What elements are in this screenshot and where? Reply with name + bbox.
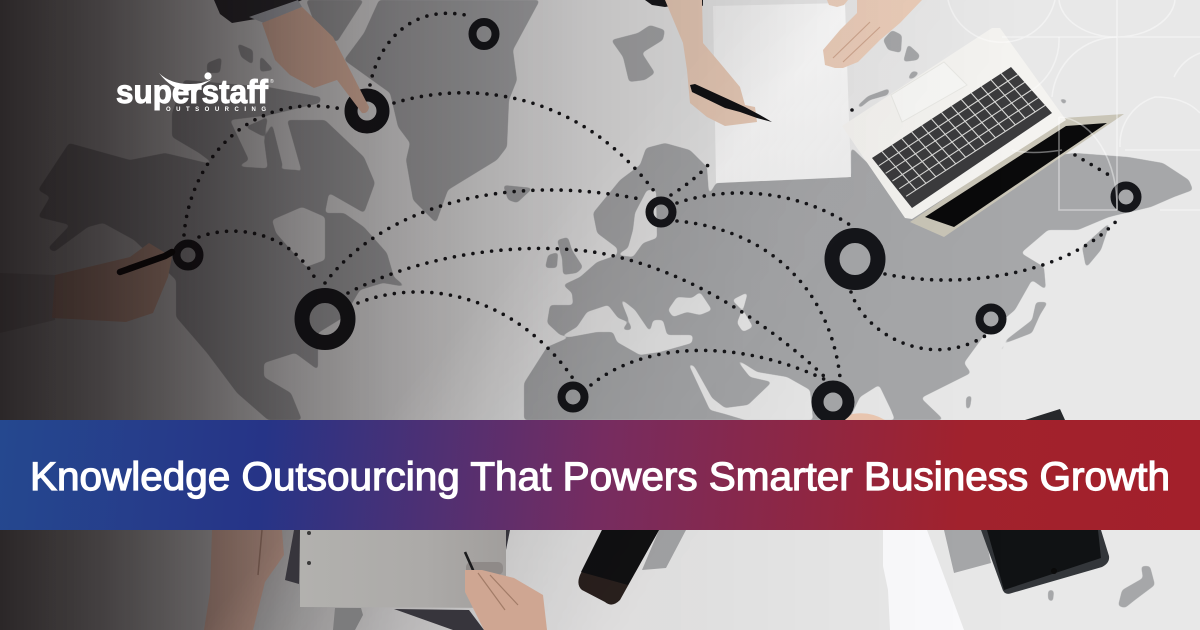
bottom notebook [285,530,510,630]
bottom map islands [1048,566,1155,608]
hand tip above banner [845,413,885,420]
world map [38,0,1193,420]
hand on paper [823,0,922,68]
ring: west [176,244,200,266]
ring: africa [562,386,584,408]
trackpad [891,62,967,122]
registered mark: ® [270,78,274,85]
laptop screen lid [910,114,1124,237]
logo wordmark: superstaff [116,73,269,110]
ring: south asia [818,386,848,418]
bottom-left hand [204,530,284,630]
ring: north [472,22,496,46]
logo ball [204,72,212,80]
decorative geometric outlines [948,0,1200,210]
top sheet of paper [713,3,851,183]
map location rings [176,22,1138,418]
ring: greenland pointed [351,95,383,127]
pen [690,84,772,122]
phone [578,530,686,605]
map land masses [38,0,1193,420]
title banner [0,420,1200,530]
laptop base [842,28,1066,219]
dark left-side gradient overlay [0,0,878,630]
logo: superstaff outsourcing [116,72,274,113]
logo subline: OUTSOURCING [166,107,266,113]
ring: east asia [980,308,1002,330]
ring: far east [1114,186,1138,208]
dotted connection routes [184,13,1120,385]
logo swoosh [159,73,212,91]
tablet corner above banner [1025,409,1065,420]
keyboard [872,67,1052,208]
binder holes [307,531,311,535]
title text: Knowledge Outsourcing That Powers Smarter Business Growth [30,455,1170,499]
ring: scandinavia [650,200,672,224]
tablet [944,530,1109,594]
ring: asia large [832,236,878,282]
map seas [272,190,895,420]
left hand with marker [0,243,172,333]
woman's writing hand [645,0,772,126]
pointing hand with suit sleeve [214,0,369,113]
laptop [842,28,1124,237]
bottom hand with pen [465,552,547,630]
white shirt sleeve [883,530,964,630]
ring: north america large [302,296,348,342]
